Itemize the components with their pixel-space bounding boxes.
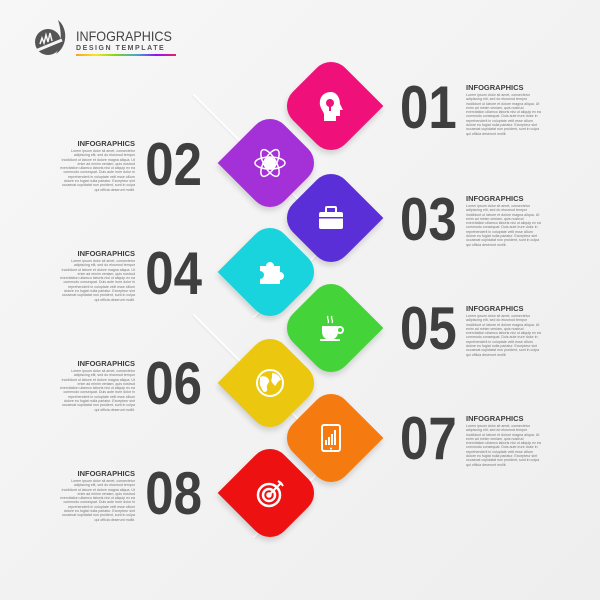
number 04: 04 [145,240,202,307]
diamond 02 purple [218,111,322,215]
diamond 04 cyan [218,220,322,324]
text block 08: INFOGRAPHICS [77,469,135,478]
text block 04: Lorem ipsum dolor sit amet, consectetur adipiscing elit, sed do eiusmod tempor incididunt ut labore et dolore magna aliqua. Ut enim ad minim veniam, quis nostrud exercitation ullamco laboris nisi ut aliquip ex ea commodo consequat. Duis aute irure dolor in reprehenderit in voluptate velit esse cillum dolore eu fugiat nulla pariatur. Excepteur sint occaecat cupidatat non proident, sunt in culpa qui officia deserunt mollit. [60,259,135,302]
text block 01: INFOGRAPHICS [466,83,524,92]
number 06: 06 [145,350,202,417]
diamond 08 red [218,441,322,545]
diamond 05 green [279,276,383,380]
diamond 06 yellow [218,331,322,435]
icon: atom [254,148,286,178]
logo [35,20,176,56]
text block 02: Lorem ipsum dolor sit amet, consectetur adipiscing elit, sed do eiusmod tempor incididunt ut labore et dolore magna aliqua. Ut enim ad minim veniam, quis nostrud exercitation ullamco laboris nisi ut aliquip ex ea commodo consequat. Duis aute irure dolor in reprehenderit in voluptate velit esse cillum dolore eu fugiat nulla pariatur. Excepteur sint occaecat cupidatat non proident, sunt in culpa qui officia deserunt mollit. [60,149,135,192]
icon: globe [256,369,284,397]
icon: head bulb [320,92,343,121]
diamond 03 blue [279,166,383,270]
number 03: 03 [400,186,457,253]
icon: logo mark [35,20,66,55]
text block 06: Lorem ipsum dolor sit amet, consectetur adipiscing elit, sed do eiusmod tempor incididunt ut labore et dolore magna aliqua. Ut enim ad minim veniam, quis nostrud exercitation ullamco laboris nisi ut aliquip ex ea commodo consequat. Duis aute irure dolor in reprehenderit in voluptate velit esse cillum dolore eu fugiat nulla pariatur. Excepteur sint occaecat cupidatat non proident, sunt in culpa qui officia deserunt mollit. [60,369,135,412]
icon: tablet chart [321,424,341,452]
diamond 07 orange [279,386,383,490]
text block 06: INFOGRAPHICS [77,359,135,368]
icon: briefcase [319,206,343,229]
diamond 01 pink [279,54,383,158]
text block 03: Lorem ipsum dolor sit amet, consectetur adipiscing elit, sed do eiusmod tempor incididunt ut labore et dolore magna aliqua. Ut enim ad minim veniam, quis nostrud exercitation ullamco laboris nisi ut aliquip ex ea commodo consequat. Duis aute irure dolor in reprehenderit in voluptate velit esse cillum dolore eu fugiat nulla pariatur. Excepteur sint occaecat cupidatat non proident, sunt in culpa qui officia deserunt mollit. [466,204,541,247]
text block 01: Lorem ipsum dolor sit amet, consectetur adipiscing elit, sed do eiusmod tempor incididunt ut labore et dolore magna aliqua. Ut enim ad minim veniam, quis nostrud exercitation ullamco laboris nisi ut aliquip ex ea commodo consequat. Duis aute irure dolor in reprehenderit in voluptate velit esse cillum dolore eu fugiat nulla pariatur. Excepteur sint occaecat cupidatat non proident, sunt in culpa qui officia deserunt mollit. [466,93,541,136]
text block 05: Lorem ipsum dolor sit amet, consectetur adipiscing elit, sed do eiusmod tempor incididunt ut labore et dolore magna aliqua. Ut enim ad minim veniam, quis nostrud exercitation ullamco laboris nisi ut aliquip ex ea commodo consequat. Duis aute irure dolor in reprehenderit in voluptate velit esse cillum dolore eu fugiat nulla pariatur. Excepteur sint occaecat cupidatat non proident, sunt in culpa qui officia deserunt mollit. [466,314,541,357]
text block 07: Lorem ipsum dolor sit amet, consectetur adipiscing elit, sed do eiusmod tempor incididunt ut labore et dolore magna aliqua. Ut enim ad minim veniam, quis nostrud exercitation ullamco laboris nisi ut aliquip ex ea commodo consequat. Duis aute irure dolor in reprehenderit in voluptate velit esse cillum dolore eu fugiat nulla pariatur. Excepteur sint occaecat cupidatat non proident, sunt in culpa qui officia deserunt mollit. [466,424,541,467]
text block 08: Lorem ipsum dolor sit amet, consectetur adipiscing elit, sed do eiusmod tempor incididunt ut labore et dolore magna aliqua. Ut enim ad minim veniam, quis nostrud exercitation ullamco laboris nisi ut aliquip ex ea commodo consequat. Duis aute irure dolor in reprehenderit in voluptate velit esse cillum dolore eu fugiat nulla pariatur. Excepteur sint occaecat cupidatat non proident, sunt in culpa qui officia deserunt mollit. [60,479,135,522]
text block 04: INFOGRAPHICS [77,249,135,258]
number 02: 02 [145,131,202,198]
text block 02: INFOGRAPHICS [77,139,135,148]
icon: cup [320,316,344,341]
title: INFOGRAPHICS [76,28,172,44]
number 01: 01 [400,74,457,141]
icon: target [256,480,284,508]
logo: DESIGN TEMPLATE [76,45,165,52]
text block 03: INFOGRAPHICS [466,194,524,203]
text block 07: INFOGRAPHICS [466,414,524,423]
number 08: 08 [145,460,202,527]
number 07: 07 [400,405,457,472]
number 05: 05 [400,295,457,362]
text block 05: INFOGRAPHICS [466,304,524,313]
icon: puzzle [260,262,284,284]
